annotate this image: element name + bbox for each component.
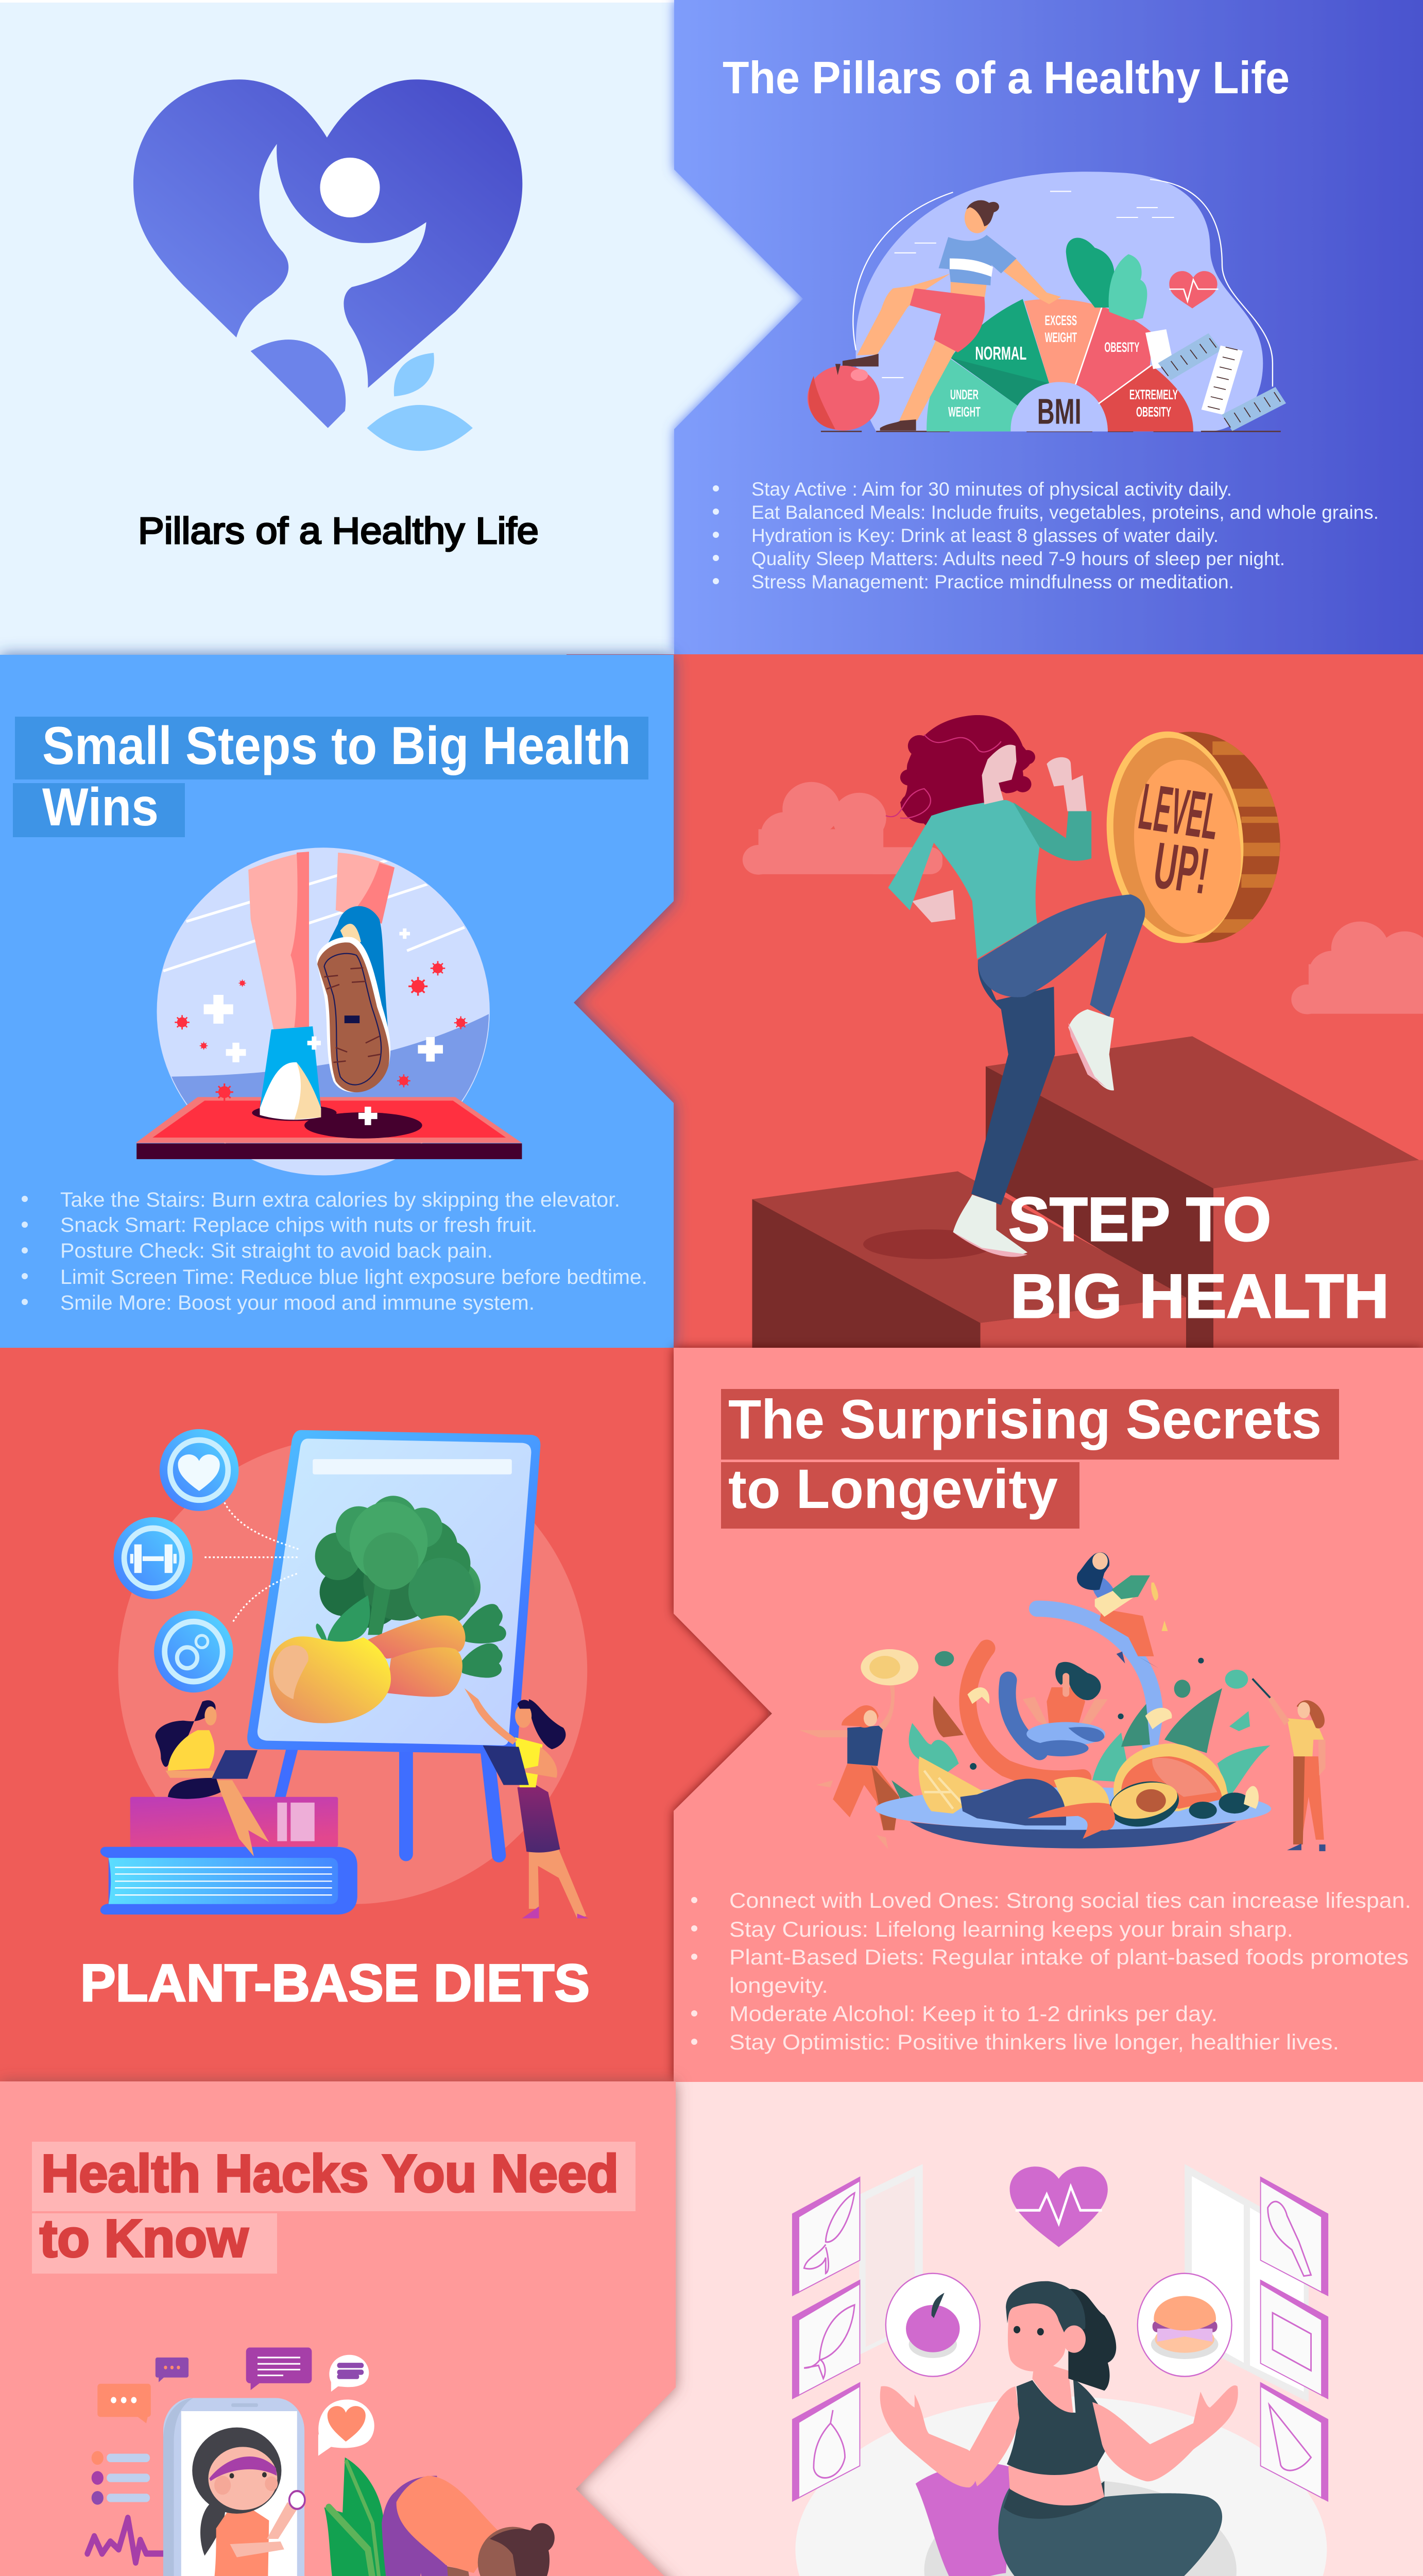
bullet list: Posture Check: Sit straight to avoid back pain.: [60, 1240, 493, 1262]
heading: to Know: [40, 2209, 249, 2268]
bullet list: Stress Management: Practice mindfulness or meditation.: [751, 571, 1234, 592]
level up coin: UP!: [1150, 828, 1213, 908]
bullet list: longevity.: [729, 1973, 828, 1997]
clouds: [743, 782, 1423, 1014]
crosses and germs: [175, 928, 468, 1125]
heading: Wins: [42, 777, 159, 837]
swirl ribbons: [968, 1608, 1155, 1779]
illustration caption: PLANT-BASE DIETS: [80, 1954, 590, 2012]
heading: The Surprising Secrets: [728, 1388, 1322, 1450]
illustration: woman choosing foods: [793, 2164, 1328, 2576]
measuring tape: [1156, 331, 1281, 423]
heading: Health Hacks You Need: [41, 2144, 619, 2203]
list and pulse: [88, 2451, 171, 2563]
illustration: feet walking on a mat: [135, 838, 522, 1175]
gauge segments: OBESITY: [1136, 404, 1171, 419]
gauge segments: BMI: [1037, 392, 1082, 431]
heading: to Longevity: [728, 1458, 1058, 1520]
logo caption: Pillars of a Healthy Life: [138, 511, 539, 552]
heading: [32, 2142, 636, 2274]
windows: [860, 2164, 1309, 2402]
bullet list: Smile More: Boost your mood and immune system.: [60, 1292, 535, 1314]
gauge segments: [927, 299, 1193, 431]
woman stretching: [843, 200, 1061, 431]
seated woman with laptop: [156, 1700, 269, 1856]
illustration: woman stepping up to level up coin: [743, 715, 1423, 1351]
easel legs: [274, 1749, 506, 1862]
food cards: [793, 2177, 1328, 2501]
panel: the surprising secrets to longevity: [674, 1348, 1423, 2082]
gauge segments: WEIGHT: [1045, 330, 1077, 345]
woman: [886, 715, 1145, 1257]
mat: [135, 1097, 522, 1159]
icon: heart logo: [133, 79, 522, 451]
illustration caption: STEP TO: [1008, 1185, 1271, 1254]
gauge segments: EXCESS: [1045, 313, 1077, 328]
woman with knife: [1253, 1679, 1326, 1851]
level up coin: [1106, 732, 1280, 943]
health icons: [114, 1429, 300, 1692]
illustration caption: BIG HEALTH: [1010, 1262, 1389, 1331]
bullet list: Snack Smart: Replace chips with nuts or fresh fruit.: [60, 1214, 537, 1236]
standing woman with clipboard: [465, 1688, 589, 1919]
floor: [795, 2396, 1327, 2576]
gauge segments: OBESITY: [1104, 340, 1140, 355]
panel: health hacks you need to know: [0, 2081, 676, 2576]
woman pouring oil: [1077, 1552, 1168, 1668]
bullet list: [713, 479, 1379, 592]
meditating woman: [1023, 1662, 1108, 1756]
leaves: [1066, 238, 1147, 320]
gauge segments: WEIGHT: [948, 404, 981, 419]
heading: [721, 1388, 1339, 1529]
bullet list: Hydration is Key: Drink at least 8 glasses of water daily.: [751, 525, 1219, 546]
cushion: [916, 2463, 1013, 2576]
bullet list: Connect with Loved Ones: Strong social ties can increase lifespan.: [729, 1888, 1411, 1912]
bullet list: [691, 1888, 1411, 2054]
bullet list: Limit Screen Time: Reduce blue light exposure before bedtime.: [60, 1266, 647, 1289]
bending woman: [382, 2476, 556, 2576]
panel: small steps to big health wins: [0, 655, 674, 1348]
foods on plate: [875, 1651, 1271, 1849]
panel: health hacks illustration: [567, 2082, 1423, 2576]
panel: the pillars of a healthy life: [674, 0, 1423, 654]
chat bubbles: [97, 2348, 374, 2456]
carrots: [368, 1604, 506, 1697]
plant: [324, 2458, 392, 2576]
stone steps: [752, 1036, 1423, 1351]
phone with girl: [163, 2398, 305, 2576]
gauge segments: UNDER: [950, 387, 979, 402]
bullet list: Moderate Alcohol: Keep it to 1-2 drinks per day.: [729, 2002, 1218, 2026]
panel: logo: [0, 3, 814, 657]
legs: [248, 852, 395, 1029]
gauge segments: NORMAL: [975, 343, 1026, 364]
heart with pulse: [1169, 271, 1218, 309]
illustration caption: [1008, 1185, 1389, 1331]
heart icon: [1010, 2166, 1108, 2247]
broccoli: [315, 1496, 481, 1635]
sitting woman: [880, 2281, 1238, 2576]
apple: [808, 364, 880, 431]
level up coin: LEVEL: [1134, 769, 1225, 853]
bullet list: [22, 1189, 647, 1314]
illustration: BMI gauge with woman: [808, 172, 1281, 431]
bullet list: Quality Sleep Matters: Adults need 7-9 hours of sleep per night.: [751, 548, 1285, 569]
heading: [13, 716, 648, 837]
bullet list: Stay Optimistic: Positive thinkers live longer, healthier lives.: [729, 2030, 1339, 2054]
stacked books: [100, 1797, 357, 1914]
heading: Small Steps to Big Health: [42, 716, 631, 776]
shoes: [260, 906, 390, 1120]
illustration: food plate and people: [799, 1552, 1326, 1851]
bullet list: Plant-Based Diets: Regular intake of plant-based foods promotes: [729, 1945, 1409, 1969]
gauge segments: EXTREMELY: [1129, 387, 1178, 402]
panel: step to big health: [567, 654, 1423, 1351]
bullet list: Take the Stairs: Burn extra calories by skipping the elevator.: [60, 1189, 620, 1211]
yellow fruit: [269, 1596, 391, 1723]
illustration: phone workout and stretching: [88, 2348, 556, 2576]
bullet list: Eat Balanced Meals: Include fruits, vegetables, proteins, and whole grains.: [751, 502, 1379, 523]
illustration: plant-based presentation: [100, 1429, 589, 1919]
presentation board: [247, 1430, 540, 1754]
bullet list: Stay Curious: Lifelong learning keeps your brain sharp.: [729, 1917, 1293, 1941]
jumping woman with plate: [799, 1649, 918, 1849]
apple and burger circles: [886, 2274, 1232, 2377]
panel: plant-base diets: [0, 1348, 783, 2084]
heading: The Pillars of a Healthy Life: [723, 52, 1290, 103]
bullet list: Stay Active : Aim for 30 minutes of physical activity daily.: [751, 479, 1232, 500]
